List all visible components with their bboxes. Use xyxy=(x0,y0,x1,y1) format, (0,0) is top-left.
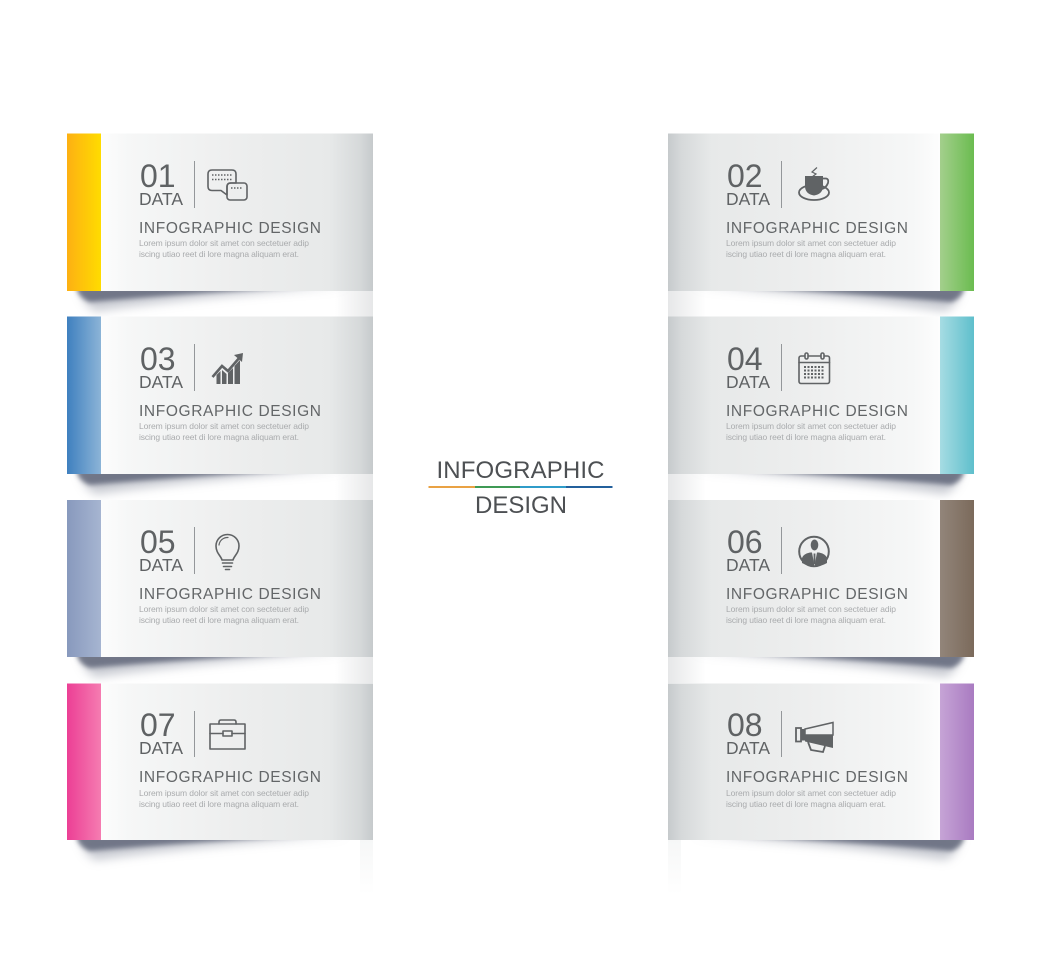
panel: card 02 xyxy=(668,134,974,317)
icon: light bulb xyxy=(216,534,239,570)
panel: card 08: 08 xyxy=(727,707,763,743)
panel: card 06 xyxy=(668,500,974,683)
icon: growth chart xyxy=(212,353,243,384)
panel: card 02: DATA xyxy=(726,189,770,209)
panel: card 08: DATA xyxy=(726,738,770,758)
panel: card 03: 03 xyxy=(140,341,176,377)
panel: card 08: iscing utiao reet di lore magna aliquam erat. xyxy=(726,799,886,809)
panel: card 01: INFOGRAPHIC DESIGN xyxy=(139,220,321,237)
panel: card 03: Lorem ipsum dolor sit amet con sectetuer adip xyxy=(139,421,309,431)
panel: card 04: INFOGRAPHIC DESIGN xyxy=(726,403,908,420)
icon: chat bubbles xyxy=(208,170,247,200)
panel: card 01: Lorem ipsum dolor sit amet con sectetuer adip xyxy=(139,238,309,248)
panel: card 04: Lorem ipsum dolor sit amet con sectetuer adip xyxy=(726,421,896,431)
title: central heading xyxy=(428,457,612,519)
panel: card 08: INFOGRAPHIC DESIGN xyxy=(726,769,908,786)
panel: card 02: Lorem ipsum dolor sit amet con sectetuer adip xyxy=(726,238,896,248)
icon: businessman xyxy=(799,537,829,566)
icon: calendar xyxy=(799,353,830,384)
panel: card 06: 06 xyxy=(727,524,763,560)
panel: card 07: DATA xyxy=(139,738,183,758)
panel: card 03 xyxy=(67,316,373,500)
panel: card 02: iscing utiao reet di lore magna aliquam erat. xyxy=(726,249,886,259)
panel: card 06: Lorem ipsum dolor sit amet con sectetuer adip xyxy=(726,604,896,614)
panel: card 04: DATA xyxy=(726,372,770,392)
panel: card 03: DATA xyxy=(139,372,183,392)
panel: card 06: INFOGRAPHIC DESIGN xyxy=(726,586,908,603)
panel: card 07: 07 xyxy=(140,707,176,743)
icon: briefcase xyxy=(210,720,245,749)
panel: card 04 xyxy=(668,316,974,500)
panel: card 07: Lorem ipsum dolor sit amet con sectetuer adip xyxy=(139,788,309,798)
panel: card 05: iscing utiao reet di lore magna aliquam erat. xyxy=(139,615,299,625)
panel: card 03: iscing utiao reet di lore magna aliquam erat. xyxy=(139,432,299,442)
panel: card 07: iscing utiao reet di lore magna aliquam erat. xyxy=(139,799,299,809)
panel: card 03: INFOGRAPHIC DESIGN xyxy=(139,403,321,420)
panel: card 01: DATA xyxy=(139,189,183,209)
title: central heading: INFOGRAPHIC xyxy=(436,457,604,484)
panel: card 07 xyxy=(67,684,373,895)
title: central heading: DESIGN xyxy=(475,492,567,519)
panel: card 06: iscing utiao reet di lore magna aliquam erat. xyxy=(726,615,886,625)
panel: card 05: 05 xyxy=(140,524,176,560)
panel: card 04: 04 xyxy=(727,341,763,377)
panel: card 06: DATA xyxy=(726,555,770,575)
panel: card 01: 01 xyxy=(140,158,176,194)
panel: card 02: INFOGRAPHIC DESIGN xyxy=(726,220,908,237)
panel: card 05: DATA xyxy=(139,555,183,575)
panel: card 08 xyxy=(668,684,974,895)
panel: card 01 xyxy=(67,134,373,317)
panel: card 05: Lorem ipsum dolor sit amet con sectetuer adip xyxy=(139,604,309,614)
panel: card 04: iscing utiao reet di lore magna aliquam erat. xyxy=(726,432,886,442)
panel: card 07: INFOGRAPHIC DESIGN xyxy=(139,769,321,786)
icon: coffee cup xyxy=(799,168,829,200)
icon: megaphone xyxy=(796,722,833,752)
panel: card 08: Lorem ipsum dolor sit amet con sectetuer adip xyxy=(726,788,896,798)
panel: card 05: INFOGRAPHIC DESIGN xyxy=(139,586,321,603)
panel: card 01: iscing utiao reet di lore magna aliquam erat. xyxy=(139,249,299,259)
panel: card 02: 02 xyxy=(727,158,763,194)
panel: card 05 xyxy=(67,500,373,683)
